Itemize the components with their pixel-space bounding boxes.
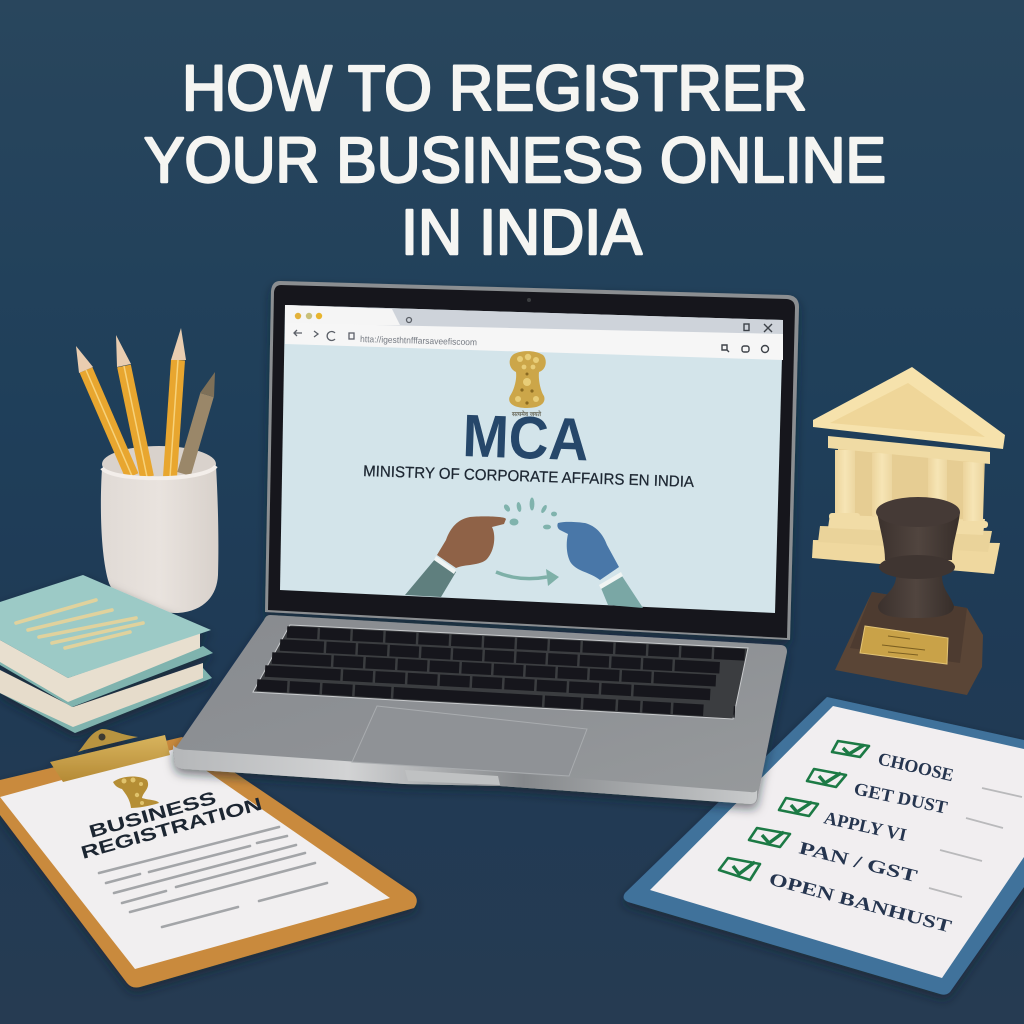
national emblem bbox=[509, 351, 546, 408]
notch bbox=[405, 770, 500, 785]
roof bbox=[813, 367, 1005, 449]
checkboxes bbox=[719, 741, 869, 880]
paper text lines bbox=[99, 827, 327, 927]
trackpad bbox=[352, 706, 587, 776]
title bbox=[144, 52, 886, 268]
columns bbox=[829, 450, 988, 528]
cup rim and interior bbox=[102, 446, 216, 482]
window and toolbar icons bbox=[722, 324, 772, 352]
title: IN INDIA bbox=[401, 196, 642, 268]
blue board bbox=[624, 697, 1024, 995]
trophy top bbox=[876, 497, 960, 527]
page background bbox=[280, 305, 783, 613]
arrow bbox=[496, 569, 559, 586]
address bar bbox=[285, 323, 783, 360]
gavel trophy bbox=[835, 497, 983, 695]
laptop base bbox=[173, 615, 787, 804]
emblem caption: सत्यमेव जयते bbox=[511, 410, 542, 418]
checklist text: PAN / GST bbox=[797, 837, 919, 886]
book cover gold stripes bbox=[16, 600, 143, 648]
courthouse model bbox=[812, 367, 1005, 574]
entablature bbox=[828, 436, 990, 464]
browser screen bbox=[280, 305, 783, 613]
ministry line: MINISTRY OF CORPORATE AFFAIRS EN INDIA bbox=[363, 463, 695, 491]
clipboard: business registration bbox=[0, 729, 417, 988]
cup front lip bbox=[102, 466, 216, 478]
blue hand bbox=[557, 522, 619, 580]
camera bbox=[527, 298, 531, 302]
trophy cup bbox=[877, 512, 960, 560]
trophy ring bbox=[879, 555, 955, 579]
browser tab bar bbox=[285, 305, 783, 334]
paper bbox=[650, 706, 1024, 978]
right sleeve bbox=[599, 572, 643, 608]
url text: htta://igesthtnfffarsaveefiscoom bbox=[360, 334, 477, 347]
MCA heading: MCA bbox=[462, 402, 590, 473]
checklist text bbox=[767, 748, 956, 937]
title: YOUR BUSINESS ONLINE bbox=[144, 124, 886, 196]
temple wall bbox=[838, 445, 985, 520]
brown hand bbox=[437, 516, 506, 568]
title: HOW TO REGISTRER bbox=[182, 52, 807, 124]
temple base steps bbox=[812, 514, 1000, 574]
paper emblem bbox=[113, 776, 159, 808]
pencil cup with pencils bbox=[76, 328, 218, 613]
keyboard bbox=[253, 625, 748, 719]
paper heading: REGISTRATION bbox=[79, 794, 264, 863]
navigation icons bbox=[294, 318, 412, 341]
window dots bbox=[295, 313, 322, 319]
metal clip bbox=[50, 729, 170, 782]
trophy plinth bbox=[835, 592, 983, 695]
trophy lower stem bbox=[878, 575, 954, 618]
checklist dashes bbox=[929, 788, 1022, 897]
paper bbox=[0, 749, 390, 969]
brass plate bbox=[860, 626, 948, 664]
cup body bbox=[101, 466, 218, 613]
checklist text: APPLY VI bbox=[822, 807, 908, 845]
checklist board bbox=[624, 697, 1024, 995]
paper heading bbox=[79, 788, 264, 863]
checklist text: GET DUST bbox=[852, 778, 949, 818]
laptop lid bbox=[265, 281, 799, 640]
paper heading: BUSINESS bbox=[87, 788, 218, 842]
clipboard board bbox=[0, 737, 417, 988]
laptop bbox=[173, 281, 799, 804]
stack of books bbox=[0, 575, 213, 733]
left sleeve bbox=[405, 556, 456, 597]
sparkle marks bbox=[503, 498, 557, 529]
checklist text: OPEN BANHUST bbox=[767, 869, 954, 937]
pencils bbox=[76, 328, 215, 477]
checklist text: CHOOSE bbox=[876, 748, 956, 785]
